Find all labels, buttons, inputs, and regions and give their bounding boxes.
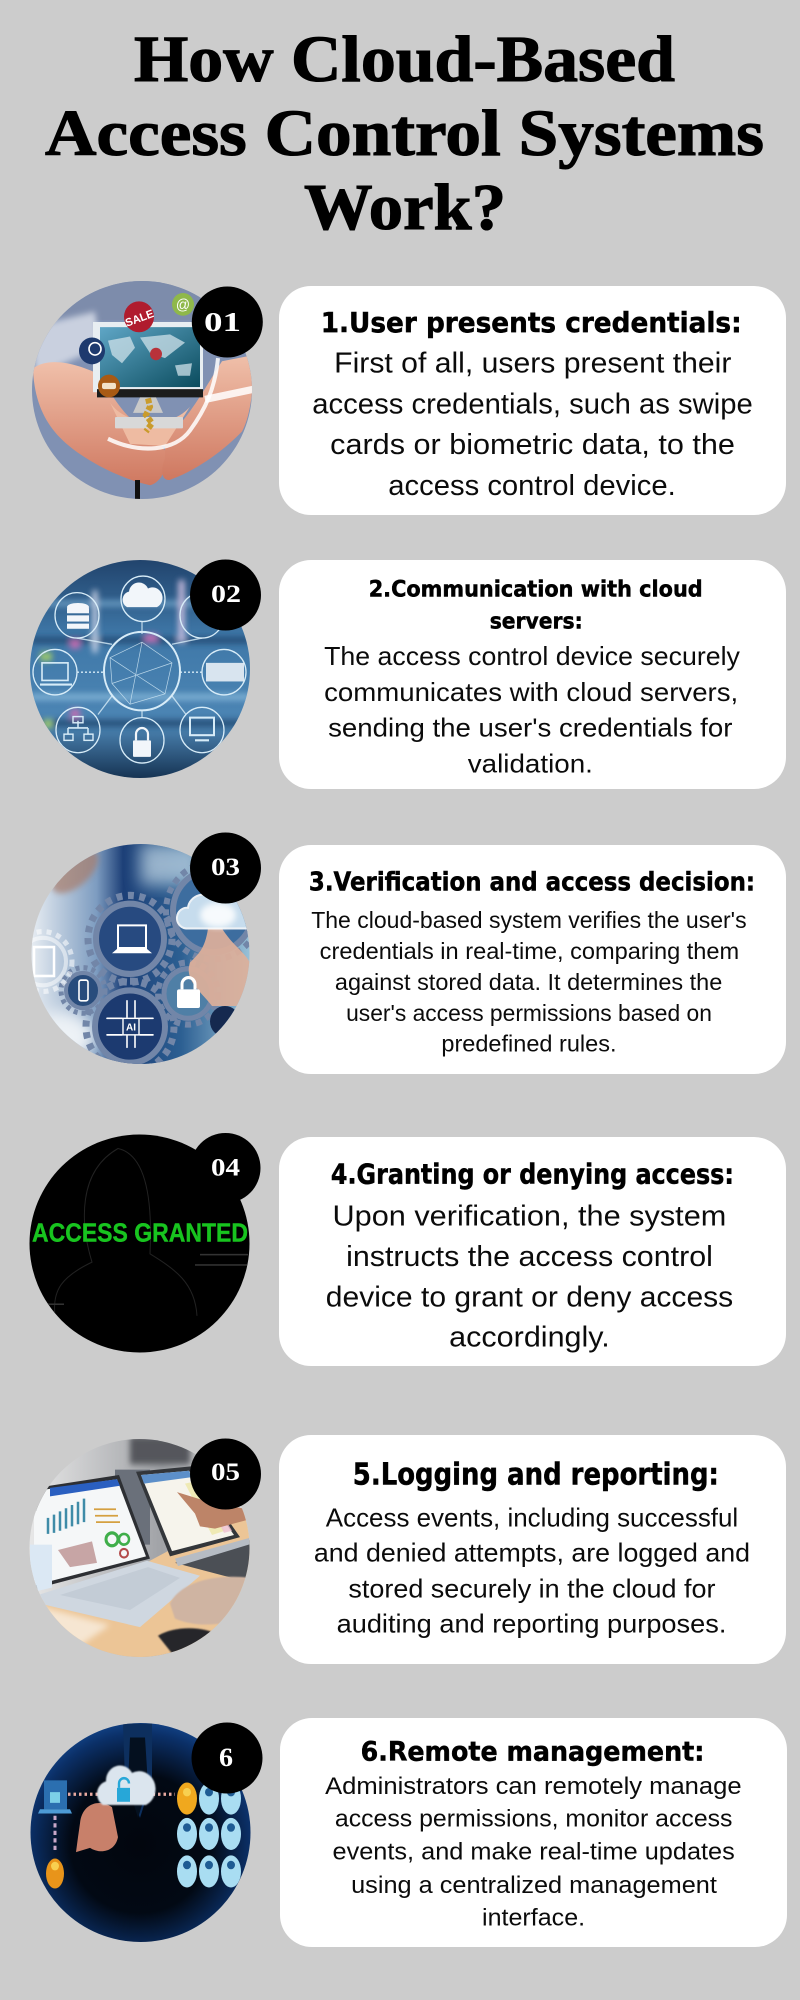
heading: step 5: 5.Logging and reporting: (353, 1457, 719, 1492)
heading: step 4: 4.Granting or denying access: (331, 1159, 734, 1191)
title: Access Control Systems (45, 97, 764, 170)
text: step 2: validation. (468, 749, 593, 779)
card: step 6 (280, 1718, 787, 1947)
badge: 02 (190, 560, 261, 630)
heading: step 2: servers: (490, 609, 583, 635)
text: step 6: interface. (482, 1904, 585, 1931)
heading: step 1: 1.User presents credentials: (321, 306, 742, 339)
text: step 3: credentials in real-time, comparing them (320, 938, 739, 964)
text: step 5: and denied attempts, are logged and (314, 1538, 750, 1568)
card: step 1 (279, 286, 786, 515)
image: access granted silhouette (28, 1132, 252, 1355)
card: step 3 (279, 845, 786, 1074)
heading: step 2 (369, 577, 703, 635)
text: step 3: The cloud-based system verifies the user's (311, 907, 747, 933)
badge: 6 (192, 1722, 262, 1794)
title (45, 23, 764, 244)
image: laptops with dashboards (28, 1436, 252, 1659)
text: step 2: communicates with cloud servers, (324, 677, 738, 707)
badge: 04 (190, 1133, 260, 1203)
text: step 4: device to grant or deny access (326, 1281, 733, 1313)
image: hands holding monitor (30, 279, 254, 502)
image: hands holding monitor: @ (176, 297, 190, 314)
text: step 4 (326, 1201, 733, 1353)
title: How Cloud-Based (134, 23, 675, 96)
badge: 02: 02 (211, 581, 241, 608)
panel: step 1 user presents credentials (30, 279, 786, 515)
text: step 6: access permissions, monitor access (335, 1805, 732, 1832)
badge: 03: 03 (211, 854, 240, 881)
text: step 2: sending the user's credentials for (328, 713, 733, 743)
text: step 6 (325, 1773, 742, 1931)
image: hands holding monitor: SALE (124, 308, 156, 330)
text: step 1: cards or biometric data, to the (330, 429, 735, 461)
text: step 1: access control device. (388, 470, 676, 502)
image: server network diagram (28, 558, 252, 781)
panel: step 2 communication with cloud servers (28, 558, 786, 789)
badge: 01: 01 (204, 307, 241, 337)
text: step 6: events, and make real-time updates (332, 1839, 735, 1866)
badge: 03 (190, 832, 261, 904)
image: access granted silhouette: ACCESS GRANTED (32, 1219, 248, 1248)
card: step 5 (279, 1435, 786, 1664)
panel: step 6 remote management (28, 1718, 787, 1947)
badge: 6: 6 (219, 1743, 233, 1772)
panel: step 4 granting or denying access (28, 1132, 786, 1366)
image: gears and cloud security: AI (126, 1023, 136, 1034)
heading: step 2: 2.Communication with cloud (369, 577, 703, 603)
text: step 5: stored securely in the cloud for (348, 1573, 716, 1603)
text: step 5: Access events, including successful (326, 1503, 738, 1533)
image: businessman managing access (28, 1721, 252, 1944)
text: step 1 (312, 348, 753, 502)
panel: step 3 verification and access decision (14, 832, 786, 1074)
text: step 3: against stored data. It determines the (335, 969, 722, 995)
text: step 4: instructs the access control (346, 1241, 713, 1273)
card: step 4 (279, 1137, 786, 1366)
text: step 2: The access control device securely (324, 641, 740, 671)
text: step 3 (311, 907, 747, 1057)
text: step 5 (314, 1503, 750, 1638)
image: gears and cloud security (32, 844, 250, 1064)
text: step 1: First of all, users present their (334, 348, 732, 380)
text: step 3: predefined rules. (441, 1031, 616, 1057)
badge: 04: 04 (211, 1155, 241, 1182)
text: step 6: Administrators can remotely manage (325, 1773, 742, 1800)
badge: 05 (190, 1438, 261, 1510)
text: step 4: accordingly. (449, 1321, 610, 1353)
badge: 01 (192, 286, 263, 358)
title: Work? (304, 171, 506, 244)
text: step 1: access credentials, such as swipe (312, 388, 753, 420)
text: step 5: auditing and reporting purposes. (337, 1608, 726, 1638)
text: step 4: Upon verification, the system (332, 1201, 726, 1233)
text: step 3: user's access permissions based on (346, 1000, 712, 1026)
heading: step 6: 6.Remote management: (361, 1737, 704, 1768)
badge: 05: 05 (211, 1459, 240, 1486)
text: step 6: using a centralized management (351, 1872, 717, 1899)
card: step 2 (279, 560, 786, 789)
panel: step 5 logging and reporting (28, 1435, 786, 1664)
text: step 2 (324, 641, 740, 779)
